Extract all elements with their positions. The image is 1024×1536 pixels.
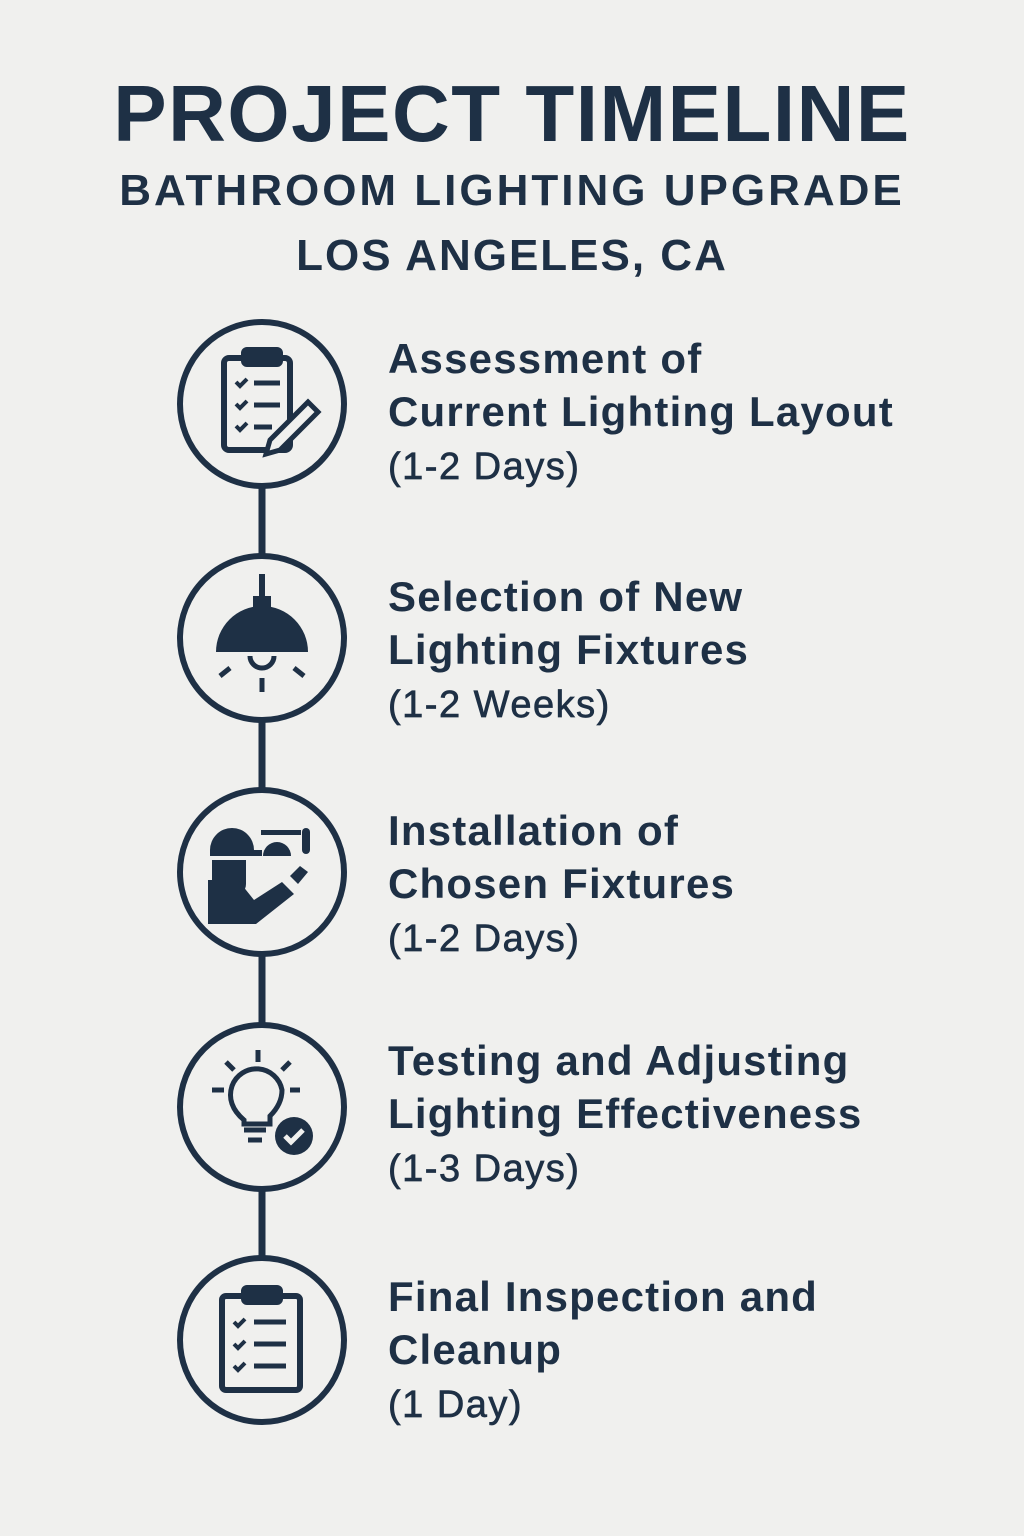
step 3 text	[388, 807, 735, 960]
icon: bulb with check	[180, 1025, 344, 1189]
step 1 text: (1-2 Days)	[388, 446, 580, 488]
step 1 text	[388, 335, 894, 488]
step 5 text: Cleanup	[388, 1326, 562, 1373]
step 2 text	[388, 573, 749, 726]
step 2 text: Lighting Fixtures	[388, 626, 749, 673]
title: PROJECT TIMELINE	[113, 69, 911, 158]
location: LOS ANGELES, CA	[296, 231, 728, 280]
subtitle: BATHROOM LIGHTING UPGRADE	[119, 166, 905, 215]
step 5 text	[388, 1273, 818, 1426]
icon: pendant lamp	[180, 556, 344, 720]
step 3 text: Installation of	[388, 807, 679, 854]
step 2 text: Selection of New	[388, 573, 743, 620]
step 5 text: (1 Day)	[388, 1384, 523, 1426]
step 2 text: (1-2 Weeks)	[388, 684, 611, 726]
step 4 text: Testing and Adjusting	[388, 1037, 850, 1084]
icon: installer	[180, 790, 344, 954]
step 1 text: Current Lighting Layout	[388, 388, 894, 435]
step 3 text: Chosen Fixtures	[388, 860, 735, 907]
step 5 text: Final Inspection and	[388, 1273, 818, 1320]
step 1 text: Assessment of	[388, 335, 702, 382]
step 4 text: (1-3 Days)	[388, 1148, 580, 1190]
icon: clipboard	[180, 322, 344, 486]
step 4 text	[388, 1037, 862, 1190]
icon: final clipboard	[180, 1258, 344, 1422]
step 3 text: (1-2 Days)	[388, 918, 580, 960]
step 4 text: Lighting Effectiveness	[388, 1090, 862, 1137]
